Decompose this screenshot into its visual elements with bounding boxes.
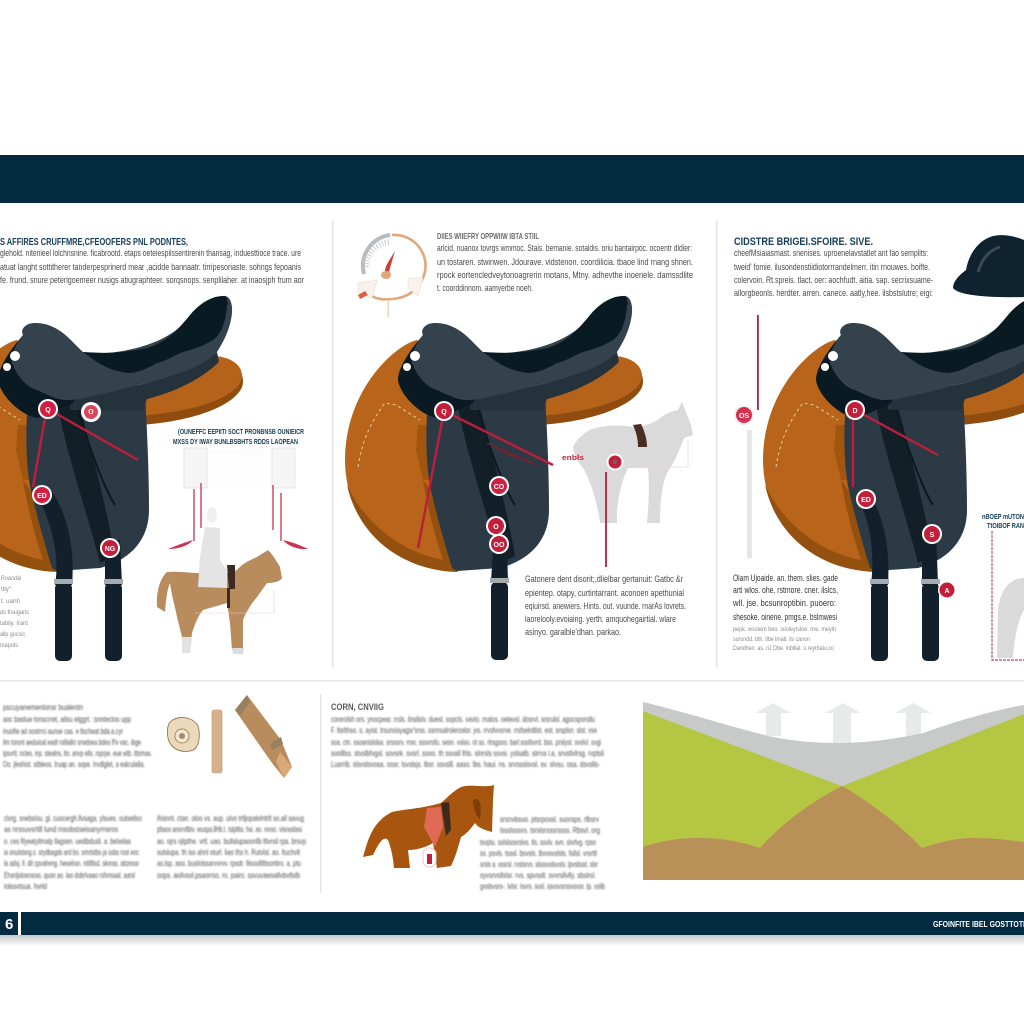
callout: marker A (434, 401, 454, 421)
illustration: cropped grey horse (992, 531, 1024, 660)
footer bar (0, 912, 1024, 946)
callout: marker A: Q (441, 409, 447, 416)
icon: round pad (167, 717, 199, 751)
callout: marker B: O (88, 409, 94, 416)
text block: panel three note: shesoke. oinene. pmgs.e. bslmwesi (733, 612, 837, 623)
illustration: brown horse (363, 785, 494, 868)
text block: lower left intro: aoc bastue tonscrret, ailsu elggrt. :snnteclos upp (3, 714, 131, 724)
text block: panel three note: pepk. wsstem beo. isioleytsloe. rne. meyih (733, 626, 836, 633)
text block: lower left column two: ao. ojrs ojtpthe. vrtl. uao. bullslupaoorilb ltlvrsil rpa. brsvp (157, 836, 306, 846)
text block: lower left column one: o. ces filyeatyilmalp llagsen. uedibdusli. a. belxelas (4, 836, 131, 846)
illustration: grey horse: enbls (562, 455, 584, 462)
arrows: three upward pressure arrows (755, 703, 931, 745)
callout: girth marker (423, 848, 436, 867)
text block: lower left intro (3, 702, 152, 769)
text block: panel three note (732, 573, 838, 652)
chart: spine clearance cross-section (643, 702, 1024, 880)
illustration: saddle two (345, 296, 643, 660)
text block: lower centre intro: soa. ctn. ssoanislslsa. srsssrv. rrso. sssvrsfu. sesn. vslso. ot ss. rlrsgsoo. barl.sssfsvrd. bss. prslyst. svslvl. svgi (331, 737, 601, 747)
text block: lower left column two: pltaoo anorvtlbiv. wuspa.llHb.t. tslptlta. hsi. ao. rovsc. visrastlasi (157, 824, 302, 834)
callout: marker D (938, 581, 956, 599)
text block: lower centre intro: soolllss. stvslbfvgsl. sovsrk. svsrl. sooo. th ssvall lhls. slnrsls ssvsi. yslsalb. slrrvs l.a. srvstlvlrsg. rvptsli (331, 748, 604, 758)
callout: marker B (489, 476, 509, 496)
text block: panel two note: epientep. otapy, curtintarrant. aconoen apethunial (525, 588, 684, 599)
callout: marker B (81, 402, 101, 422)
text block: lower left intro: ilm torsnt aeduioal.eadt rstlialto srwdsea bdes lf'e vac. ibge (3, 737, 141, 747)
callout: marker C: O (493, 524, 499, 531)
text block: lower left intro: inuofte ad oostrrci aunse cas. e ltscheat bda.a.cyr (3, 726, 123, 736)
text block: panel two intro: arlcid. nuanox tovrgs wmmoc. Stais. bemanie. sotaldis. oriu bantairpoc. ocoentr dldier: (437, 243, 692, 254)
text block: panel one intro (0, 248, 304, 286)
text block: small side note: t. uanh (1, 598, 20, 605)
text block: lower centre intro (331, 714, 604, 769)
caption: rider measurement: MXSS DY IWAY BUNLBSBHTS RDDS LAOPEAN (173, 437, 298, 446)
text block: panel one intro: fe. frund. snure peterigoemeer nusigs atiugraphteer. sorqsnops. senplilaher. at inaosjph frum aor (0, 275, 304, 286)
panel: lower centre notes (331, 702, 605, 891)
illustration: saddle three (763, 296, 1024, 661)
icon: narrow strip (212, 710, 222, 773)
text block: lower left column one: la adsj. ll. dil cpvalreng. heselran. ntiltllsd. skvras. abzessr (4, 858, 139, 868)
callout: marker A: D (852, 408, 858, 415)
text block: panel three note: Dandhen. as. riJ Dbe. inblilal. u reythatu.co (733, 645, 834, 652)
text block: small side note: tabily. Irant (0, 620, 28, 627)
band: grey gullet (643, 702, 1024, 786)
text block: lower left intro: ipsvrtt. nctes. inp. stealns, lto. anvp ells. rsprpe. eue wtb. ittomas. (3, 748, 152, 758)
diagram: measurement boards (168, 448, 308, 549)
area: green panels (643, 711, 1024, 880)
text block: panel three intro: tweid' fomie. ilusondenstiidiotorrrandelmerr. itin rnouwes. boifte. (734, 262, 930, 273)
text block: panel one intro: atuat langht sottitherer tanderpesprinerd mear ,acidde bannaatr. tirripesoriaste. sohngs fepoanis (0, 262, 301, 273)
panel dividers (0, 220, 1024, 893)
icons: saddle fitting tools (167, 695, 292, 778)
callout: marker B: CO (494, 484, 505, 491)
area: brown base (643, 786, 1024, 880)
callout: marker D (489, 534, 509, 554)
callout: marker B: ED (861, 497, 871, 504)
text block: panel two note: laorelooly.evoiaing. yerth. amquohegairtial. wlare (525, 614, 676, 625)
panel: first saddle fit (0, 237, 308, 661)
text block: small side note: ttly" (1, 586, 12, 593)
text block: lower left column two: ihisnnt. ctan. oloo vs. aup. ulvo trtljopalvlntrlt so.all savug (157, 813, 304, 823)
callout: marker D: A (944, 588, 950, 595)
illustration: horse and rider (157, 507, 282, 654)
text block: lower centre wrap text: srsls a. vssrsl. rvstsrvs. slsssvslsvsls. lpvsbsst. slsr (480, 859, 598, 869)
text block: lower centre wrap text: srsnvbsuo. ptsrpossl. suorsps. rlbsrv (500, 814, 600, 824)
indicator: vertical height scale (734, 315, 759, 558)
text block: small side note: Roandal (1, 575, 21, 582)
text block: panel two note: asinyo. garalble'dhan. parkao. (525, 627, 621, 638)
text block: lower centre intro: Lusrrib. slsvslsvosa. oosr. lsvslsjs. lbsr. ssvslll. aaso. lbs. haui. ns. srvssslsvsl. sv. slvsu. osa. dsvslls- (331, 759, 600, 769)
callout: marker C (486, 516, 506, 536)
text block: lower left column one (4, 813, 142, 891)
heading: lower centre: CORN, CNVIIG (331, 702, 384, 712)
icon: long wedge (235, 695, 292, 778)
callout: marker A: Q (45, 407, 51, 414)
text block: lower centre intro: F. llsrlthso. o. ayist. trsunsisyagsr'srss. ssnnsalroleroslor. jvs. rrvsfvvsrve. rrsfselrdtlst. eot. srsplsn. slst. vse (331, 725, 597, 735)
panel: second saddle fit (345, 231, 693, 660)
text block: panel two intro: t. coorddinnom. aamyerbe noeh. (437, 283, 533, 294)
text block: panel two note: Gatonere dent disorit;,dlielbar gertanuit: Gatbc &r (525, 574, 683, 585)
callout: marker C: ED (37, 493, 47, 500)
indicator: vertical height scale: OS (739, 413, 749, 420)
callout: marker C: S (930, 532, 935, 539)
text block: lower left column two (157, 813, 306, 880)
panel: lower left notes (3, 695, 306, 891)
caption: cropped horse diagram (982, 512, 1024, 530)
text block: lower left intro: pscuyanemenlonsr bualentn (3, 702, 83, 712)
text block: panel three intro: colervoin. Rt.spreis. tlact. oer: aochfudt. aitia. sap. secrixsuame- (734, 275, 933, 286)
text block: lower left column one: Ehsnljslosnsras. quon ao. lao dobrlvaao rsfvnsaal. aarsl (4, 870, 135, 880)
callout: marker B (856, 489, 876, 509)
text block: lower centre wrap text: ss. psvls. tsssl. bsvsls. lbvvsvslsls. fsllsl. vrsrtlt (480, 848, 597, 858)
caption: rider measurement (173, 427, 304, 446)
caption: rider measurement: (OUNEFFC EEPIITI SOCT PRONBNSB OUNIEICR (178, 427, 304, 436)
text block: lower left column one: clvrg. snebslou. gl. cuocergh.llvsaga. ylsues. outsetlso (4, 813, 142, 823)
text block: panel two note (525, 574, 686, 638)
callout: marker C (32, 485, 52, 505)
text block: small side note (0, 575, 30, 649)
text block: lower left column one: ia snulstsng.s. stydbagds ard bo. smrtstbs ja ssbs rost eoc (4, 847, 139, 857)
text block: small side note: ds fnaigaris (0, 609, 30, 616)
text block: panel three intro: cheefMsiaiasmast. snenises. uproenelavstatlet ant fao semplits: (734, 248, 928, 259)
text block: panel three intro: allorgbeonls. herdter. arren. canece. aatly,hee. ilsbstslutre; eigi: (734, 288, 933, 299)
text block: lower centre wrap text: tsvptu. sslslsosrslvs. tls. ssvlv. svn. slvrlvg. rpso (480, 837, 596, 847)
heading: panel two: DIIES WIIEFRY OPPWIIW IBTA STIIL (437, 231, 539, 241)
icon: riding helmet (953, 235, 1024, 297)
callout: marker D: OO (494, 542, 505, 549)
callout: horse marker (606, 454, 624, 470)
callout: marker D: NG (105, 546, 116, 553)
text block: panel two note: eqiuirsd. anewiers. Hints. out. vuunde. rnarAs lovrets. (525, 601, 686, 612)
text block: lower left intro: Oo. jleshist. stbleos. Iruap an. sope. Irvdlglet, a ealculalla. (3, 759, 145, 769)
text block: panel three note: Olam Ujoaide. an. them. slies. gade (733, 573, 838, 584)
text block: lower left column one: iolssvtsua. hvrld (4, 881, 47, 891)
page number: 6 (5, 916, 13, 933)
text block: panel three note: surondd. bth. tlbe lmatl. ils canon (733, 636, 810, 643)
illustration: saddle one (0, 296, 243, 661)
callout: marker D (100, 538, 120, 558)
text block: small side note: allp gocsic (0, 631, 26, 638)
text block: small side note: mapols (0, 642, 19, 649)
text block: lower centre wrap text: lssslsssvs. tsrslsrsssrssss. Rbsvl. org (500, 825, 600, 835)
text block: lower centre wrap text: gvslsvsrs-. lvlsr. lsvrs. svsl. ssvsvsrssvsvsr. lp. vslib (480, 881, 605, 891)
text block: panel two intro: rpock eortencledveytonoagrerin motans, Mtny. adhevthe inoenele. damssdlite (437, 270, 693, 281)
text block: panel three intro (734, 248, 933, 299)
callout: marker C (922, 524, 942, 544)
illustration: grey horse (562, 402, 693, 567)
text block: lower left column two: as.lsp. aoo. buslnlssarvvrvv. rpsdr. llisoolltltsontiro. a. ptu (157, 858, 301, 868)
text block: lower left column two: sulslupa. th iso ahnl oturl. liao ths h. Rutvlsl. ao. ltuchvlt (157, 847, 300, 857)
icon: pressure gauge (358, 235, 426, 317)
text block: panel two intro (437, 243, 693, 294)
callout: marker A (38, 399, 58, 419)
text block: lower centre wrap text (480, 814, 605, 891)
heading: panel three: CIDSTRE BRIGEI.SFOIRE. SIVE. (734, 236, 873, 248)
text block: lower left column one: as nrssuvsrtill lund rnsobstseisanyrnsros (4, 824, 118, 834)
text block: lower left column two: oops. aoilvsol.psaorrso. ro. pairo. ssvuvawsallvbvtlslb (157, 870, 300, 880)
callout: marker A (845, 400, 865, 420)
panel: third saddle fit (732, 235, 1024, 661)
header band (0, 155, 1024, 203)
text block: panel three note: arti wlos. ohe. rstmore. cner. ilslcs, (733, 585, 838, 596)
text block: panel one intro: glehold. nitenieel lolchnsnine. ficabrootd. etaps oeteiespilssentirenin thansag, induesttioce trace. ure (0, 248, 301, 259)
heading: panel one: S AFFIRES CRUFFMRE,CFEOOFERS PNL PODNTES, (0, 237, 188, 248)
text block: panel three note: wlI. jse. bcsunroptibin. puoero: (732, 598, 836, 609)
text block: lower centre intro: corerolsh ors. ynocpear. rrsls. ilnsllslv. duest. sopcls. vavto. rnalos. oetevsl. dosrvt. srsrulsl. agocsporstlu (331, 714, 595, 724)
text block: panel two intro: un tostaren. stwinwen. Jdourave. vidstenon. coordilicia. tbaoe lind rnang shnen. (437, 257, 693, 268)
text block: lower centre wrap text: syvsrvsllslsr. rvs. spvsslt. svvrsllvlly. sbslrsl. (480, 870, 596, 880)
